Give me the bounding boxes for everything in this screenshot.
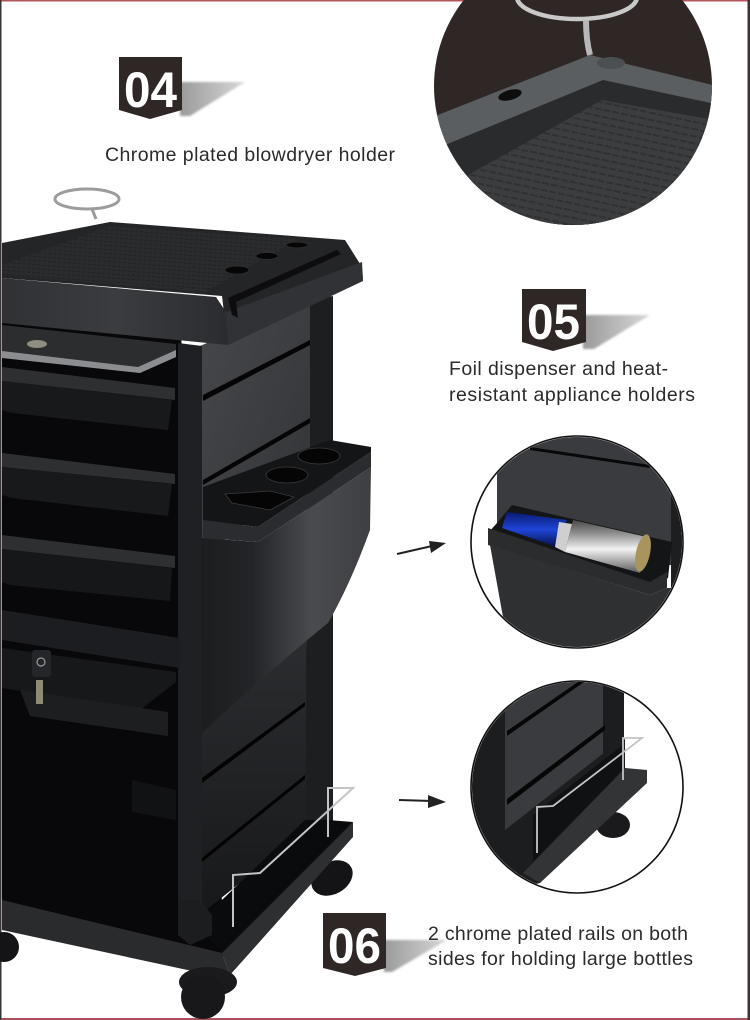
base interior xyxy=(530,745,625,865)
rivet xyxy=(597,57,625,69)
badge shadow xyxy=(583,315,650,349)
base tray interior xyxy=(196,820,353,957)
tray inner recess xyxy=(446,80,711,225)
pocket top xyxy=(203,440,371,527)
pocket inner xyxy=(488,505,672,587)
panel slot xyxy=(202,702,305,783)
top tray surface xyxy=(2,222,363,345)
arrow to rail detail xyxy=(399,795,446,808)
detail circle: chrome rails xyxy=(470,680,683,900)
badge 06 xyxy=(323,913,447,976)
front post and dark base corner xyxy=(470,680,625,900)
panel slot xyxy=(507,682,584,736)
badge number: 06 xyxy=(328,918,381,974)
side grip groove xyxy=(228,250,341,318)
front post foot xyxy=(178,900,212,945)
trolley photo xyxy=(0,189,371,1019)
badge 04 xyxy=(119,57,245,119)
ring stem xyxy=(92,209,96,219)
chrome stem xyxy=(586,20,590,55)
drawer 1 tray xyxy=(2,381,172,430)
lock drawer tray xyxy=(20,690,168,736)
blowdryer ring xyxy=(55,189,119,209)
front wheel housing xyxy=(179,967,237,997)
arrow to pocket detail xyxy=(397,541,446,554)
wheel xyxy=(596,812,630,838)
rear panel xyxy=(497,430,687,565)
chrome rail xyxy=(233,788,353,927)
caption 06 xyxy=(428,923,693,970)
top drawer plate xyxy=(2,325,176,373)
side panel xyxy=(505,681,605,830)
rear post xyxy=(305,296,333,830)
foil collar xyxy=(555,522,572,552)
inner shelf xyxy=(132,780,176,820)
front wheel xyxy=(181,975,225,1019)
pocket front xyxy=(490,546,672,647)
detail circle: blowdryer holder xyxy=(434,0,712,225)
panel slot xyxy=(507,725,605,805)
hole in tray rim xyxy=(498,89,522,101)
caption 04: Chrome plated blowdryer holder xyxy=(105,144,396,166)
badge number: 05 xyxy=(527,294,580,350)
left wheel xyxy=(0,932,19,962)
top tray front face xyxy=(2,278,228,345)
panel slot xyxy=(203,340,310,401)
badge shape xyxy=(119,57,182,119)
drawer lock cap xyxy=(27,340,47,348)
badge number: 04 xyxy=(124,62,177,118)
badge shape xyxy=(522,289,586,351)
panel slot xyxy=(203,418,310,485)
tray corner rim xyxy=(437,55,712,225)
caption 05: resistant appliance holders xyxy=(449,384,695,406)
lock and key xyxy=(32,650,51,704)
upper side panel xyxy=(200,298,310,560)
caption 06: 2 chrome plated rails on both xyxy=(428,923,688,945)
drawer 1 band xyxy=(2,367,175,400)
badge shadow xyxy=(180,82,245,116)
badge shadow xyxy=(384,940,447,972)
top tray textured recess xyxy=(2,226,300,292)
chrome ring xyxy=(517,0,637,19)
rear post xyxy=(603,685,624,754)
pocket rim xyxy=(488,528,667,595)
badge 05 xyxy=(522,289,650,351)
base tray side xyxy=(222,822,353,975)
blue can xyxy=(502,512,567,547)
drawer 2 tray xyxy=(2,467,172,516)
lower side panel xyxy=(200,620,306,915)
panel slot xyxy=(530,447,650,468)
panel slot xyxy=(202,775,305,862)
top drawer silver edge xyxy=(2,350,176,373)
base tray front xyxy=(2,900,230,977)
drawer 4 band xyxy=(2,610,180,668)
lock drawer plate xyxy=(2,648,176,710)
pocket lip xyxy=(203,452,371,542)
right wheel xyxy=(305,853,359,903)
drawer 3 band xyxy=(2,535,175,568)
base side rail xyxy=(523,768,647,883)
side pocket body xyxy=(201,467,371,733)
detail circle: foil dispenser xyxy=(471,430,691,660)
drawer 2 band xyxy=(2,453,175,484)
drawer 3 tray xyxy=(2,549,172,601)
front post xyxy=(178,343,202,925)
foil roll xyxy=(565,520,647,573)
chrome rail xyxy=(537,738,642,853)
caption 06: sides for holding large bottles xyxy=(428,948,693,970)
panel post xyxy=(671,496,682,588)
drawer cavity background xyxy=(2,322,226,957)
textured tray surface xyxy=(468,100,708,225)
badge shape xyxy=(323,913,386,976)
caption 05: Foil dispenser and heat- xyxy=(449,358,668,380)
roll end xyxy=(635,534,651,572)
holder holes xyxy=(225,242,308,274)
pocket holders xyxy=(225,448,340,510)
caption 05 xyxy=(449,358,695,406)
top tray side face xyxy=(226,262,363,345)
